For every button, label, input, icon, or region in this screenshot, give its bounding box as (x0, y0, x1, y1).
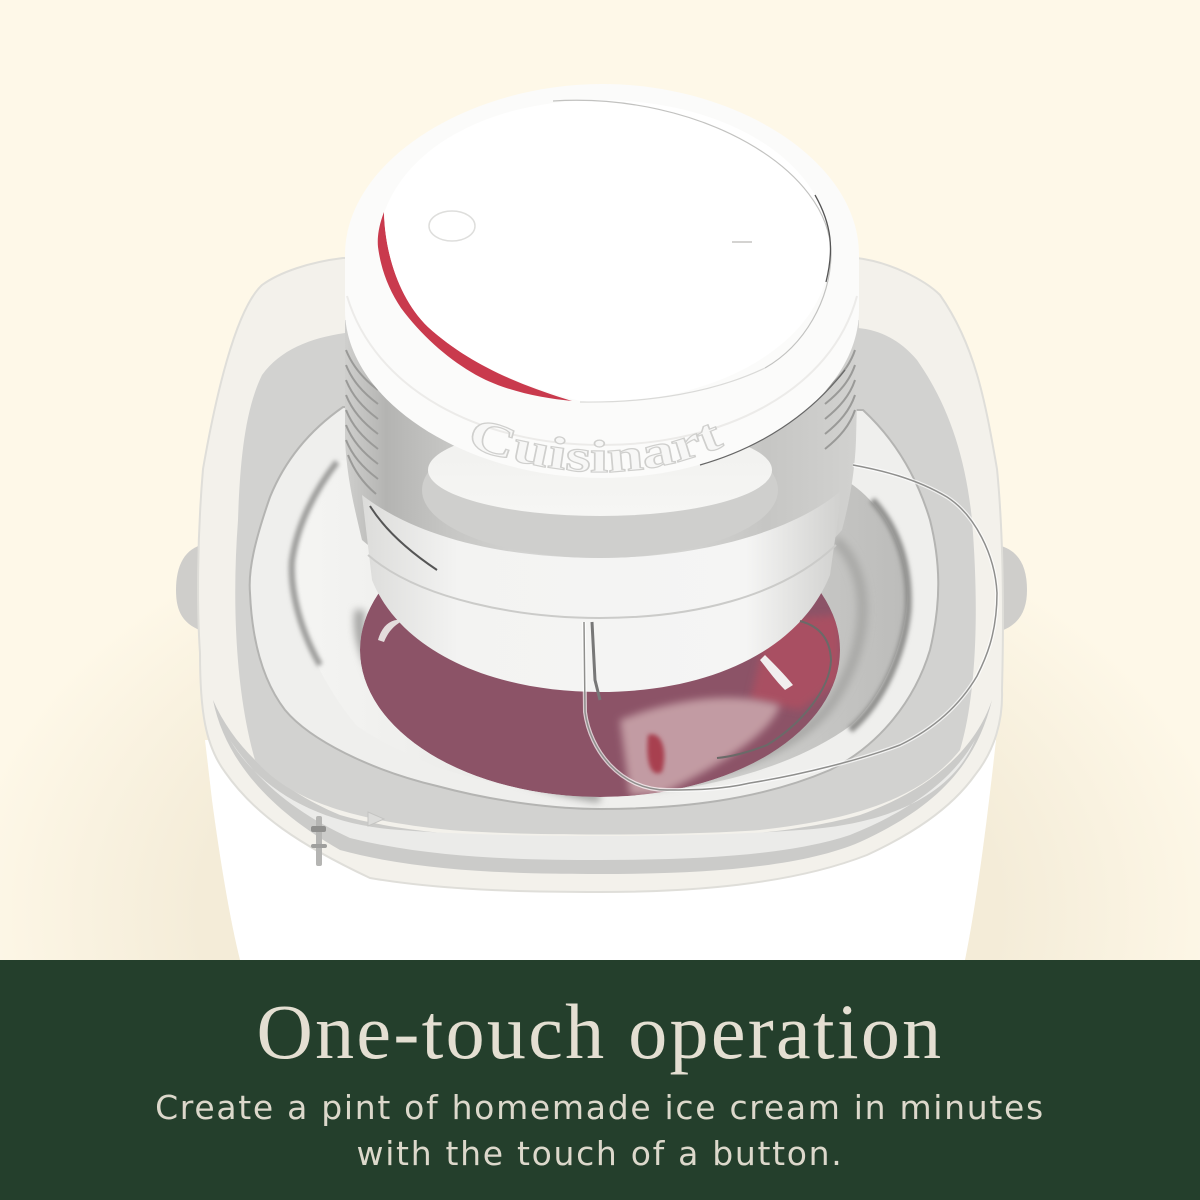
lid latch (311, 816, 327, 866)
collar edge (700, 370, 845, 465)
power on symbol (732, 241, 752, 243)
description: with the touch of a button. (356, 1134, 844, 1173)
lid arrow mark (368, 812, 384, 826)
clear paddle (584, 465, 997, 790)
description: Create a pint of homemade ice cream in minutes (155, 1088, 1045, 1127)
caption band (0, 960, 1200, 1200)
power off symbol (429, 211, 475, 241)
metal bowl (290, 460, 908, 798)
one-touch button (384, 100, 831, 402)
product illustration: ice cream maker from above (82, 84, 1118, 960)
clear cylinder (345, 320, 859, 616)
brand logo text: Cuisinart (472, 422, 725, 473)
heading: One-touch operation (256, 988, 943, 1075)
dark seam (370, 506, 437, 570)
translucent lid (198, 258, 1003, 892)
red ring (378, 212, 572, 401)
machine base (205, 740, 996, 960)
housing divider line (368, 545, 836, 618)
top collar (345, 84, 859, 478)
description (155, 1088, 1045, 1173)
lid tabs (176, 544, 1027, 632)
chrome ring (250, 407, 938, 809)
lower housing (362, 490, 842, 692)
collar groove (347, 296, 857, 445)
ice cream (360, 593, 840, 797)
ridges (346, 350, 855, 494)
brand logo curve (466, 441, 735, 472)
grey lid panel (235, 328, 976, 834)
inner dome (422, 422, 778, 558)
